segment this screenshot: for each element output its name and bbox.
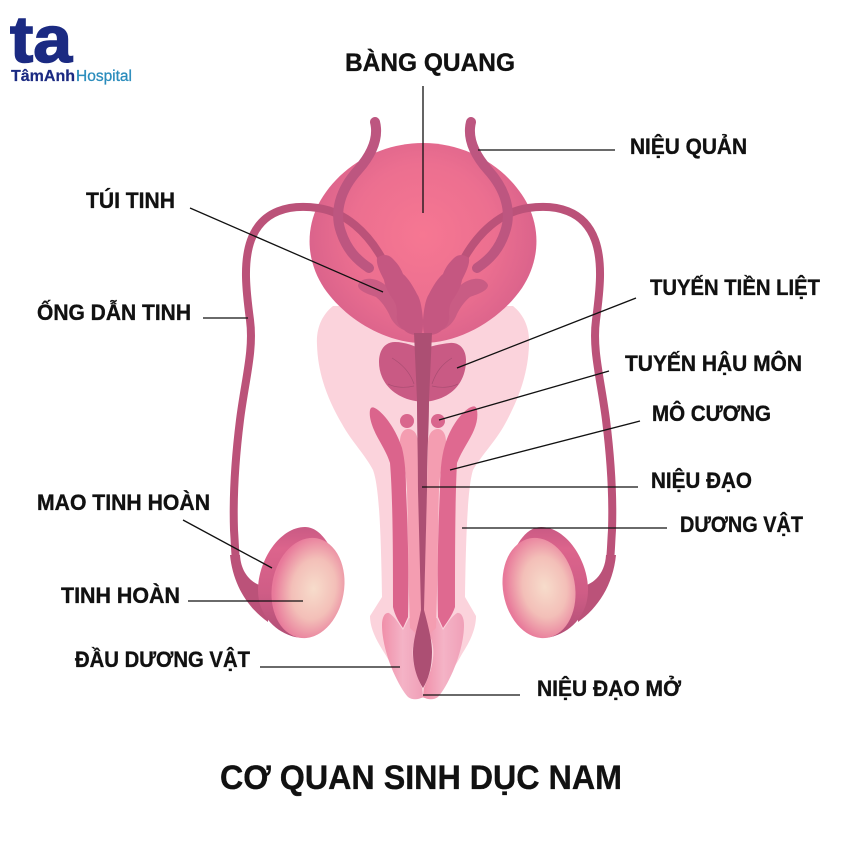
logo: Tam Anh Hospital (10, 2, 132, 85)
labels (37, 48, 821, 701)
ureter left (338, 122, 376, 268)
bladder (310, 143, 536, 343)
labels: MÔ CƯƠNG (652, 401, 771, 426)
seminal vesicle right (423, 255, 488, 335)
title: CƠ QUAN SINH DỤC NAM (220, 759, 622, 797)
labels: MAO TINH HOÀN (37, 490, 210, 515)
glans left (382, 613, 423, 699)
logo: Tam Anh Hospital: TâmAnh (11, 68, 75, 85)
urethra (413, 333, 432, 688)
labels: BÀNG QUANG (345, 48, 515, 77)
labels: TINH HOÀN (61, 583, 180, 608)
erectile tissue right (438, 406, 477, 628)
labels: DƯƠNG VẬT (680, 512, 803, 537)
anatomical diagram (230, 122, 616, 699)
labels: ỐNG DẪN TINH (37, 299, 191, 325)
body outline: penis and pelvic area (317, 306, 529, 698)
labels: NIỆU ĐẠO (651, 468, 752, 493)
corpus spongiosum right (423, 429, 446, 640)
seminal vesicle left (358, 255, 423, 335)
leader lines (183, 86, 667, 695)
erectile tissue left (370, 407, 408, 628)
testis right (495, 527, 616, 644)
labels: TUYẾN TIỀN LIỆT (650, 275, 821, 300)
logo: Tam Anh Hospital: Hospital (76, 68, 132, 85)
bulbourethral glands (400, 414, 445, 428)
logo: Tam Anh Hospital: ta (10, 2, 73, 76)
labels: NIỆU ĐẠO MỞ (537, 676, 681, 701)
glans right (423, 613, 464, 699)
labels: TUYẾN HẬU MÔN (625, 351, 802, 376)
corpus spongiosum left (400, 429, 423, 640)
vas deferens left (234, 207, 384, 560)
testis left (230, 527, 352, 644)
ureter right (470, 122, 508, 268)
prostate (379, 342, 466, 402)
labels: NIỆU QUẢN (630, 134, 747, 159)
vas deferens right (462, 207, 612, 560)
labels: ĐẦU DƯƠNG VẬT (75, 647, 251, 672)
labels: TÚI TINH (86, 188, 175, 213)
